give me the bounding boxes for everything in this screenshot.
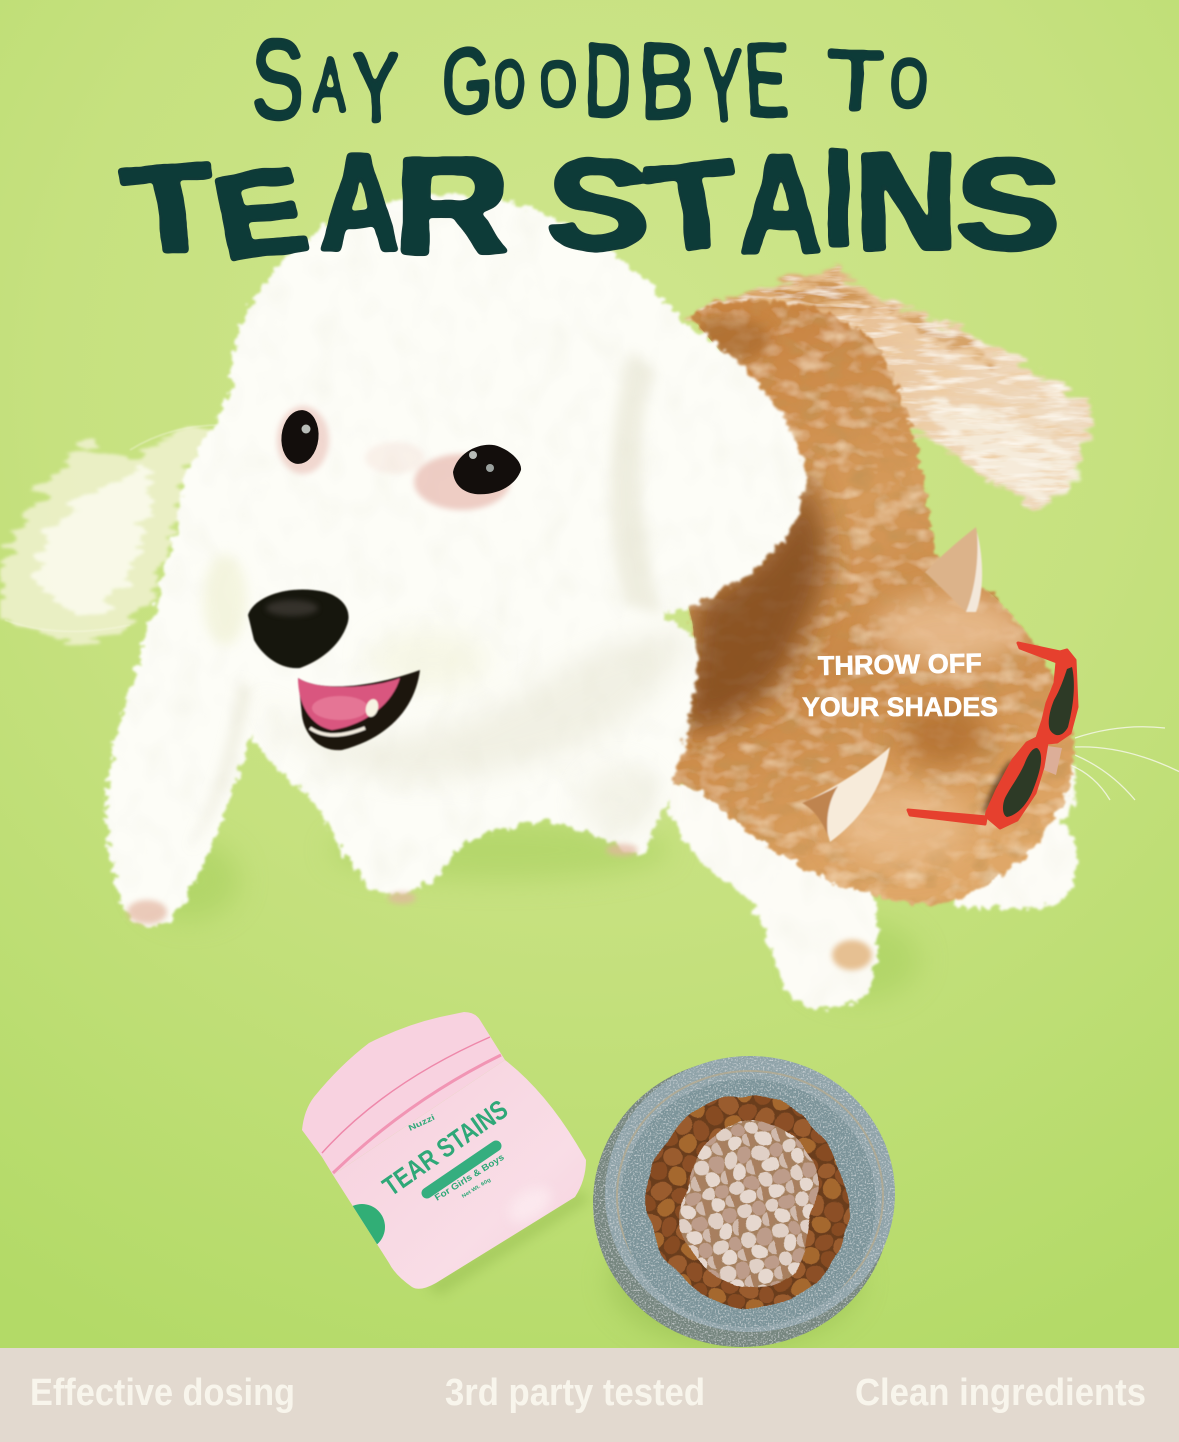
cat whiskers on the right: [1070, 727, 1179, 800]
title line one: O: [540, 47, 576, 120]
lower heart lens: [1003, 748, 1041, 817]
title line one: D: [584, 22, 632, 139]
title line one: Y: [352, 32, 399, 142]
jar highlight: [512, 1190, 548, 1220]
jar shadow: [425, 1190, 590, 1295]
dog left eye: [279, 408, 321, 466]
benefit labels: 3rd party tested: [445, 1372, 705, 1414]
jar lid: [302, 1012, 505, 1175]
title line one: E: [744, 22, 788, 139]
tail wisps: [5, 425, 222, 631]
cat white legs and paws: [662, 735, 1077, 1008]
cat upper ear: [925, 527, 982, 612]
benefit labels: Effective dosing: [30, 1372, 295, 1414]
title line one: A: [314, 39, 346, 127]
title line one: O: [889, 46, 928, 122]
title line two: R: [394, 129, 510, 281]
dog tail: [0, 425, 228, 639]
dog right eye: [453, 445, 521, 494]
cat: [658, 262, 1179, 1008]
benefit labels: Clean ingredients: [855, 1372, 1146, 1414]
jar lid seam lines: [322, 1037, 501, 1173]
jar side badge: [352, 1204, 385, 1244]
bowl inner: [620, 1079, 876, 1327]
dog body and head silhouette: [107, 195, 806, 926]
title: [117, 17, 1061, 288]
title line one: S: [251, 17, 304, 142]
title line two: A: [740, 125, 822, 282]
jar label bar: [427, 1146, 496, 1193]
cat muzzle: [1040, 745, 1062, 775]
dog paw tips: [127, 844, 638, 924]
jar label text: Nuzzi: [407, 1113, 436, 1133]
title line two: S: [955, 134, 1061, 277]
cat body and head: [658, 301, 1074, 905]
bowl shadow: [610, 1214, 860, 1346]
dog mouth: [298, 670, 420, 750]
benefit labels: [30, 1372, 1146, 1414]
dog nose: [248, 589, 349, 668]
callout: throw off your shades: THROW OFF: [818, 648, 982, 681]
title line two: E: [205, 140, 317, 288]
cat tail: [685, 262, 1089, 506]
title line two: T: [642, 132, 747, 278]
title line one: T: [828, 34, 884, 129]
callout: throw off your shades: YOUR SHADES: [802, 692, 998, 722]
dog: [107, 195, 806, 926]
cat lower ear: [802, 747, 890, 842]
paw patch: [832, 940, 872, 970]
jar label text: Net Wt. 60g: [461, 1177, 492, 1200]
title line one: G: [441, 32, 493, 133]
red heart sunglasses: [908, 643, 1077, 828]
dog shading: [190, 350, 690, 850]
jar body: [333, 1060, 586, 1289]
title line two: T: [117, 134, 226, 283]
title line two: A: [319, 127, 401, 279]
title line two: N: [854, 124, 958, 279]
cat fur shading: [680, 318, 1025, 865]
benefits band: [0, 1348, 1179, 1442]
dog pink eye stains: [277, 406, 510, 510]
title line one: O: [494, 47, 525, 120]
frame: [908, 643, 1077, 828]
upper heart lens: [1049, 667, 1074, 735]
product jar: [302, 1012, 590, 1295]
title line one: Y: [702, 27, 743, 144]
bowl rim: [605, 1056, 895, 1332]
jar label text: For Girls & Boys: [433, 1152, 506, 1203]
kibble and tablets: [647, 1094, 850, 1310]
food bowl: [593, 1056, 895, 1347]
callout: throw off your shades: [802, 648, 998, 722]
title line one: B: [639, 24, 695, 141]
title line two: I: [823, 121, 855, 275]
jar label text: TEAR STAINS: [377, 1094, 513, 1202]
title line two: S: [546, 134, 650, 277]
bowl outer wall: [593, 1059, 891, 1347]
floor shadows: [140, 820, 920, 1000]
